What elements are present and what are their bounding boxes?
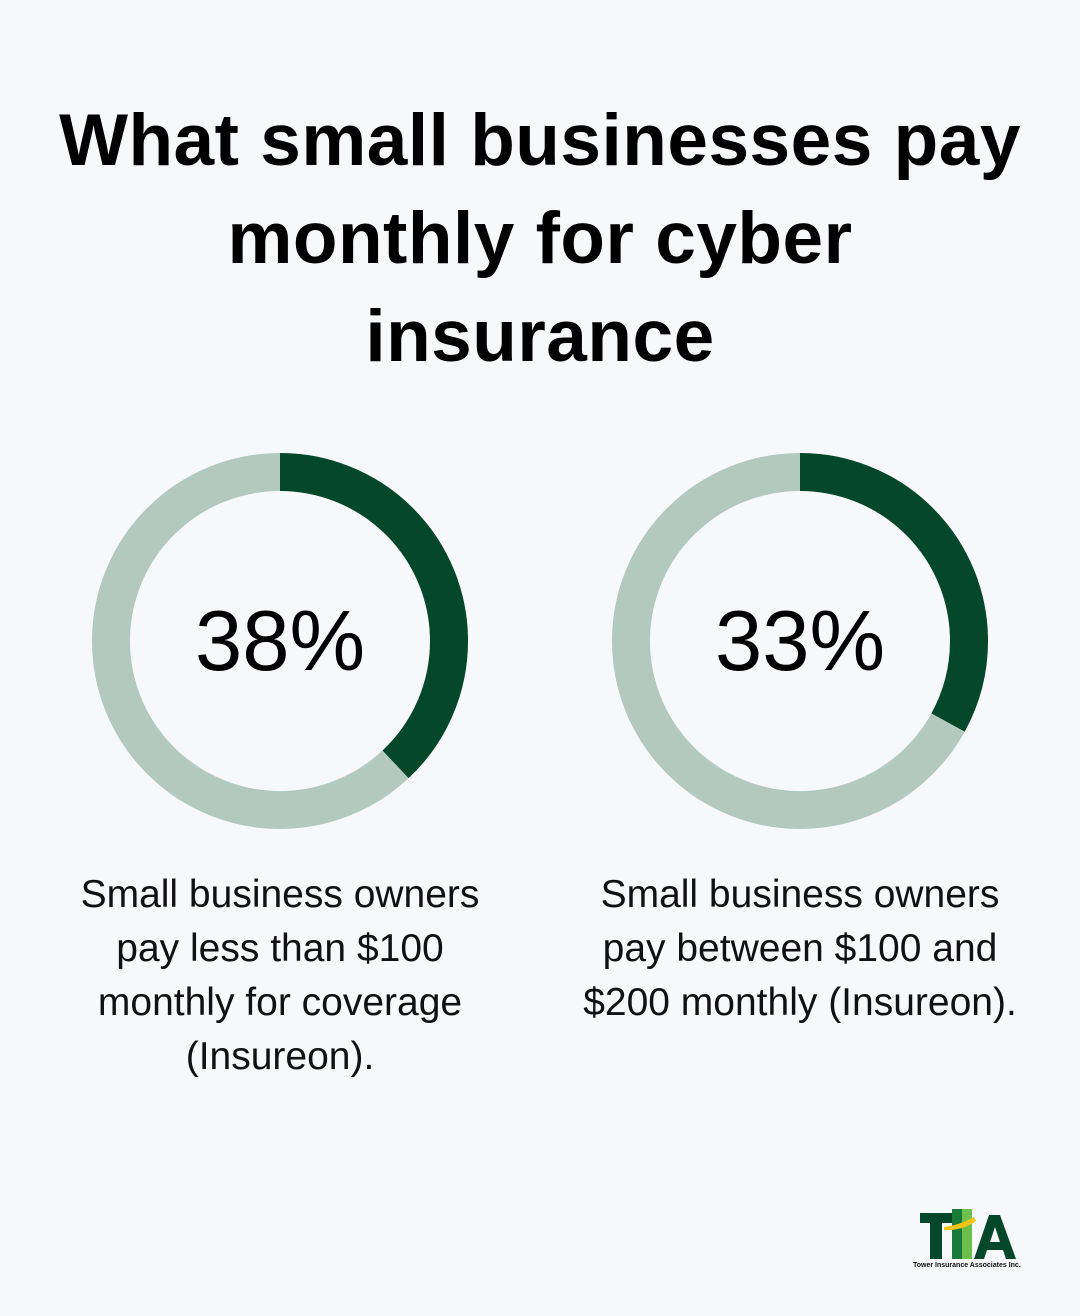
caption right: Small business owners	[601, 873, 999, 916]
title: What small businesses pay	[59, 100, 1021, 181]
caption left: Small business owners	[81, 873, 479, 916]
title	[59, 100, 1021, 377]
title: insurance	[365, 296, 715, 377]
logo	[913, 1209, 1021, 1269]
caption left: monthly for coverage	[98, 981, 462, 1024]
donut chart: 33%: 33%	[715, 594, 885, 689]
caption right	[583, 873, 1017, 1024]
donut chart: 33%	[612, 453, 988, 829]
caption right: pay between $100 and	[603, 927, 997, 970]
caption left: pay less than $100	[116, 927, 444, 970]
donut chart: 38%: 38%	[195, 594, 365, 689]
caption right: $200 monthly (Insureon).	[583, 981, 1017, 1024]
donut chart: 38%	[92, 453, 468, 829]
caption left	[81, 873, 479, 1078]
title: monthly for cyber	[227, 198, 853, 279]
caption left: (Insureon).	[186, 1035, 374, 1078]
logo: Tower Insurance Associates Inc.	[913, 1262, 1021, 1269]
